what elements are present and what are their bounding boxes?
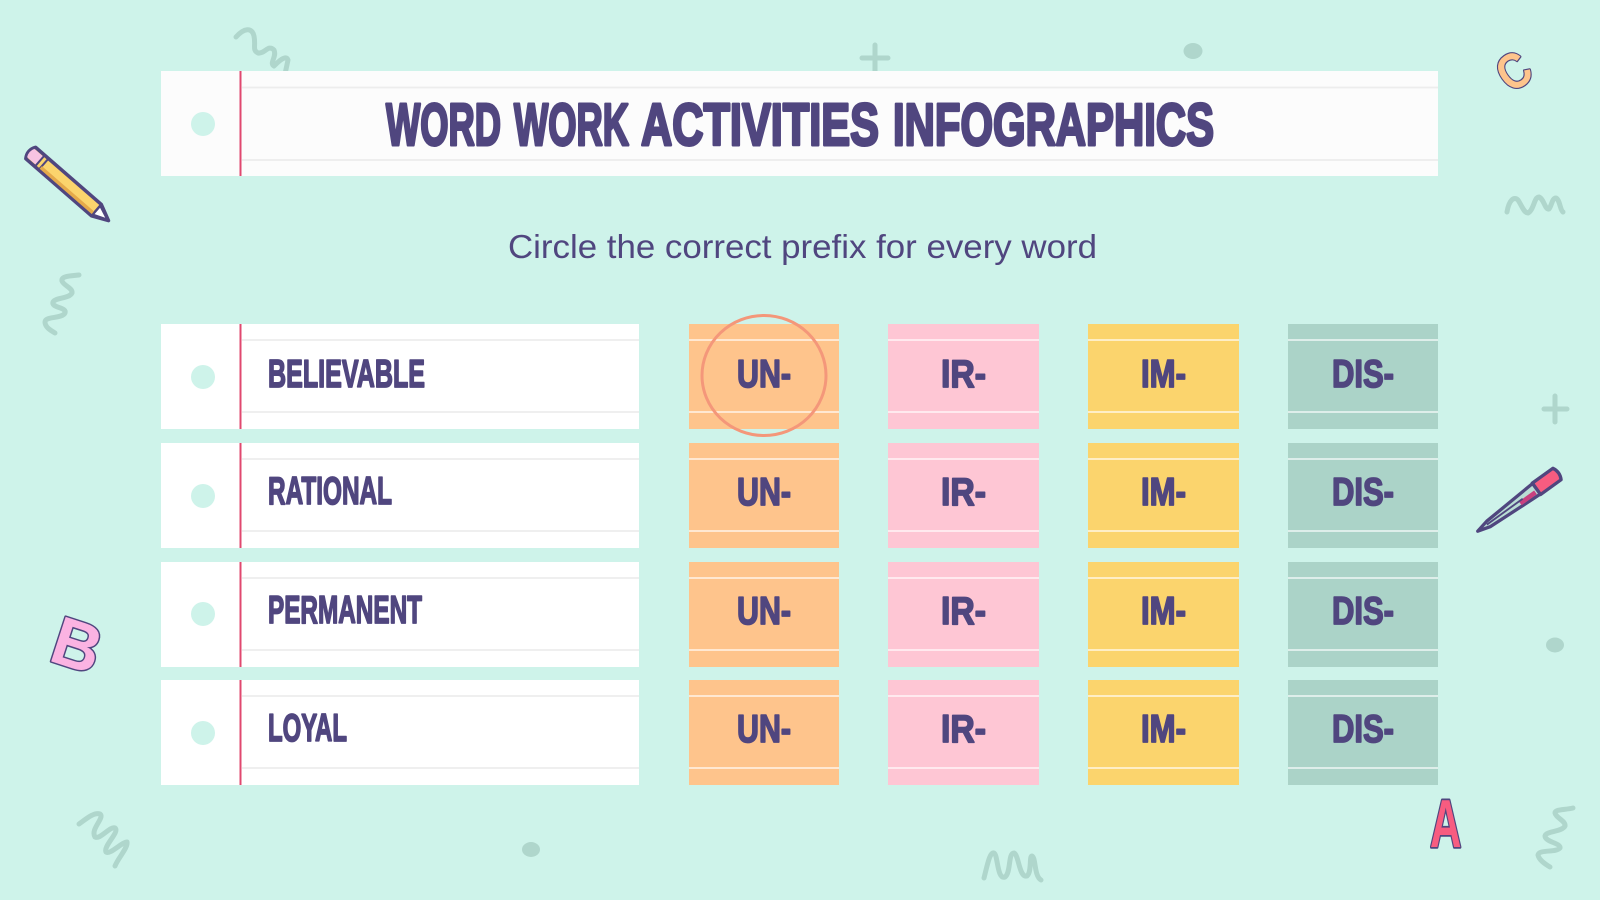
- dot: top right: [1184, 43, 1202, 59]
- column: UN-: UN-: [737, 353, 791, 396]
- squiggle: right top: [1507, 197, 1563, 213]
- plus: right: [1544, 396, 1567, 422]
- column: UN-: UN-: [737, 708, 791, 751]
- callout: circled answer: [702, 316, 826, 436]
- column: IR-: IR-: [941, 590, 986, 633]
- icon: letter C: C: [1485, 39, 1542, 103]
- squiggle: bottom left: [79, 814, 127, 866]
- column: DIS-: DIS-: [1332, 590, 1394, 633]
- column: IM-: IM-: [1141, 590, 1186, 633]
- title: ACTIVITIES: [641, 92, 879, 158]
- column: DIS-: DIS-: [1332, 471, 1394, 514]
- title: WORD: [386, 92, 501, 158]
- row: permanent: [161, 562, 639, 667]
- title: WORK: [514, 92, 629, 158]
- column: IM-: IM-: [1141, 353, 1186, 396]
- column: DIS-: DIS-: [1332, 708, 1394, 751]
- row: rational: [161, 443, 639, 548]
- squiggle: bottom center: [984, 853, 1041, 880]
- squiggle: left: [45, 275, 79, 333]
- icon: letter B: B: [42, 602, 112, 689]
- row: believable: BELIEVABLE: [268, 353, 425, 396]
- column: IR-: IR-: [941, 708, 986, 751]
- column: IM-: IM-: [1141, 471, 1186, 514]
- column: DIS-: DIS-: [1332, 353, 1394, 396]
- row: believable: [161, 324, 639, 429]
- row: loyal: LOYAL: [268, 707, 347, 750]
- squiggle: bottom right: [1538, 808, 1573, 867]
- panel: title: [161, 71, 1438, 176]
- icon: pencil: [24, 146, 113, 226]
- column: UN-: UN-: [737, 471, 791, 514]
- column: IM-: IM-: [1141, 708, 1186, 751]
- icon: letter A: A: [1430, 786, 1461, 862]
- plus: top center: [862, 45, 888, 71]
- column: IR-: IR-: [941, 353, 986, 396]
- column: UN-: [689, 324, 839, 785]
- squiggle: top left: [236, 30, 288, 74]
- column: IR-: IR-: [941, 471, 986, 514]
- column: UN-: UN-: [737, 590, 791, 633]
- title: [386, 92, 1214, 158]
- row: permanent: PERMANENT: [268, 589, 422, 632]
- icon: pen: [1474, 467, 1563, 537]
- dot: right: [1546, 638, 1564, 652]
- row: loyal: [161, 680, 639, 785]
- column: DIS-: [1288, 324, 1438, 785]
- row: rational: RATIONAL: [268, 470, 392, 513]
- column: IR-: [888, 324, 1039, 785]
- subtitle: Circle the correct prefix for every word: [508, 228, 1097, 265]
- dot: bottom: [522, 842, 540, 857]
- title: INFOGRAPHICS: [893, 92, 1214, 158]
- column: IM-: [1088, 324, 1239, 785]
